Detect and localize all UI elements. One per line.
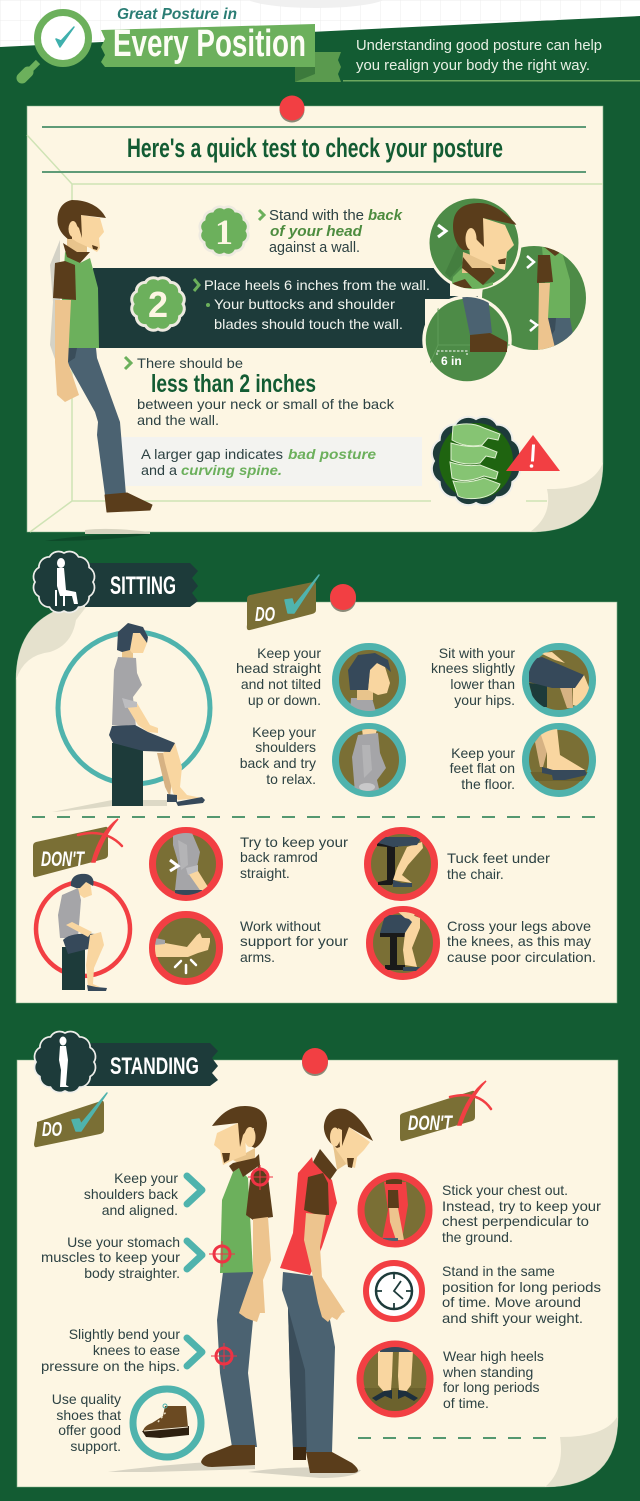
tag: do: DO bbox=[42, 1119, 62, 1141]
pin bbox=[302, 1048, 328, 1076]
text: bad posture note: A larger gap indicates bbox=[141, 446, 283, 462]
section header: sitting: SITTING bbox=[110, 572, 176, 600]
tip: knees lower: Sit with your bbox=[439, 645, 515, 661]
figure: man with good posture bbox=[108, 1106, 273, 1472]
text: high heels: Wear high heels bbox=[443, 1348, 544, 1364]
tip: quality shoes: shoes that bbox=[56, 1407, 121, 1423]
icon: unsupported arm bbox=[152, 914, 220, 982]
icon: high heels bbox=[360, 1344, 430, 1414]
text: same position: of time. Move around bbox=[442, 1294, 581, 1310]
icon: boot bbox=[133, 1389, 201, 1457]
text: step 1 bbox=[259, 208, 403, 256]
divider bbox=[32, 816, 600, 818]
tag: do bbox=[34, 1093, 107, 1147]
tag: don't bbox=[400, 1081, 491, 1141]
tip: shoulders back: back and try bbox=[240, 755, 316, 771]
figure: man against wall bbox=[50, 200, 152, 512]
header description bbox=[343, 38, 640, 82]
tip: quality shoes bbox=[52, 1391, 121, 1454]
tip: head straight bbox=[236, 645, 321, 708]
tag: don't bbox=[33, 819, 122, 877]
tip: arms: Work without bbox=[240, 918, 321, 934]
section header: standing: STANDING bbox=[110, 1053, 199, 1080]
text: less than 2 inches: less than 2 inches bbox=[151, 370, 316, 398]
heading: quick test: Here's a quick test to check your posture bbox=[127, 133, 503, 163]
text: high heels: when standing bbox=[442, 1364, 533, 1380]
tip: shoulders back: shoulders back bbox=[84, 1186, 179, 1202]
heading: great posture in: Great Posture in bbox=[117, 6, 237, 23]
tag: don't: DON'T bbox=[408, 1112, 453, 1135]
tip: feet flat bbox=[450, 745, 515, 792]
tip: crossed legs: Cross your legs above bbox=[447, 918, 591, 934]
tip: shoulders back: and aligned. bbox=[102, 1202, 178, 1218]
text: chest out: Stick your chest out. bbox=[442, 1182, 568, 1198]
tip: bend knees: Slightly bend your bbox=[69, 1326, 180, 1342]
label: 6 in: 6 in bbox=[441, 354, 462, 368]
badge: 1 bbox=[200, 207, 248, 255]
pin bbox=[330, 584, 356, 612]
icon: tucked feet bbox=[368, 830, 434, 898]
text: high heels bbox=[442, 1348, 544, 1411]
ribbon: every position bbox=[101, 23, 341, 82]
tip: stomach muscles bbox=[41, 1234, 202, 1281]
tip: knees lower bbox=[431, 645, 515, 708]
text: same position bbox=[442, 1263, 601, 1326]
tip: ramrod: back ramrod bbox=[240, 849, 318, 865]
panel: sitting bbox=[16, 552, 617, 1003]
tip: stomach muscles: muscles to keep your bbox=[41, 1249, 180, 1265]
step 2 bbox=[132, 277, 430, 332]
figure: man with poor posture bbox=[248, 1109, 373, 1478]
circle: head detail bbox=[428, 197, 520, 295]
text: step 1: Stand with the bbox=[269, 208, 364, 224]
band: step 2 background bbox=[93, 268, 478, 348]
icon: knees detail bbox=[526, 646, 592, 714]
target markers bbox=[209, 1165, 273, 1369]
text: high heels: for long periods bbox=[443, 1379, 540, 1395]
icon: ramrod back bbox=[152, 830, 220, 898]
tip: tuck feet bbox=[447, 850, 550, 882]
gap note box bbox=[120, 437, 422, 486]
icon: clock bbox=[366, 1263, 422, 1319]
text: step 1: against a wall. bbox=[269, 240, 360, 256]
tip: shoulders back: Keep your bbox=[114, 1170, 178, 1186]
text: bad posture note bbox=[141, 446, 376, 478]
divider bbox=[358, 1437, 548, 1439]
tip: feet flat: the floor. bbox=[461, 776, 515, 792]
icon: head detail bbox=[336, 646, 402, 714]
tip: shoulders back bbox=[240, 724, 316, 787]
text: same position: Stand in the same bbox=[442, 1263, 555, 1279]
panel: quick test bbox=[27, 96, 603, 541]
tip: tuck feet: Tuck feet under bbox=[447, 850, 550, 866]
tip: quality shoes: support. bbox=[70, 1438, 121, 1454]
tip: ramrod: Try to keep your bbox=[240, 834, 348, 850]
text: step 2: Your buttocks and shoulder bbox=[214, 296, 395, 312]
icon: sitting silhouette bbox=[55, 558, 78, 606]
tip: arms: arms. bbox=[240, 949, 275, 965]
tip: head straight: Keep your bbox=[257, 645, 321, 661]
tip: shoulders back: to relax. bbox=[266, 771, 316, 787]
icon: shoulders detail bbox=[336, 726, 402, 794]
header description: you realign your body the right way. bbox=[356, 58, 590, 74]
step 1 bbox=[200, 207, 403, 256]
text: high heels: of time. bbox=[443, 1395, 489, 1411]
tip: feet flat: feet flat on bbox=[450, 760, 515, 776]
tip: head straight: up or down. bbox=[248, 692, 321, 708]
tag: do bbox=[247, 575, 319, 630]
text: bad posture note: bad posture bbox=[288, 446, 376, 462]
badge: 1: 1 bbox=[215, 212, 233, 252]
panel: standing bbox=[17, 1032, 618, 1487]
tip: ramrod: straight. bbox=[240, 865, 290, 881]
text: chest out bbox=[442, 1182, 601, 1245]
text: bad posture note: curving spine. bbox=[181, 462, 282, 478]
tip: arms bbox=[240, 918, 348, 965]
tip: stomach muscles: body straighter. bbox=[84, 1265, 180, 1281]
text: bad posture note: and a bbox=[141, 462, 177, 478]
dont tips bbox=[152, 830, 596, 982]
text: chest out: Instead, try to keep your bbox=[442, 1198, 601, 1214]
tip: shoulders back bbox=[84, 1170, 202, 1218]
figure: seated woman, poor posture bbox=[36, 874, 130, 991]
text: less than 2 inches: There should be bbox=[137, 355, 243, 371]
badge: 2 bbox=[132, 278, 184, 330]
text: step 2: Place heels 6 inches from the wall. bbox=[204, 277, 430, 293]
tip: stomach muscles: Use your stomach bbox=[67, 1234, 180, 1250]
icon: feet detail bbox=[526, 726, 592, 794]
tip: knees lower: your hips. bbox=[454, 692, 515, 708]
tip: feet flat: Keep your bbox=[451, 745, 515, 761]
text: same position: position for long periods bbox=[442, 1279, 601, 1295]
text: chest out: chest perpendicular to bbox=[442, 1213, 589, 1229]
section header: sitting bbox=[34, 552, 198, 612]
text: less than 2 inches: between your neck or small of the back bbox=[137, 396, 395, 412]
do tips bbox=[236, 645, 592, 794]
tip: shoulders back: Keep your bbox=[252, 724, 316, 740]
tip: head straight: and not tilted bbox=[241, 676, 321, 692]
tip: quality shoes: Use quality bbox=[52, 1391, 121, 1407]
text: step 1: of your head bbox=[270, 224, 363, 240]
text: step 1: back bbox=[368, 208, 403, 224]
tag: do: DO bbox=[255, 604, 275, 626]
text: less than 2 inches: and the wall. bbox=[137, 412, 219, 428]
tip: arms: support for your bbox=[240, 933, 348, 949]
ribbon: every position: Every Position bbox=[113, 23, 306, 65]
tip: bend knees: knees to ease bbox=[93, 1342, 180, 1358]
text: same position: and shift your weight. bbox=[442, 1310, 583, 1326]
section header: standing bbox=[35, 1032, 218, 1092]
header bbox=[22, 6, 640, 82]
header description: Understanding good posture can help bbox=[356, 38, 602, 54]
tip: crossed legs bbox=[447, 918, 596, 965]
tip: bend knees bbox=[41, 1326, 202, 1374]
tip: knees lower: knees slightly bbox=[431, 660, 515, 676]
figure: seated woman, good posture bbox=[52, 623, 210, 812]
icon: crossed legs bbox=[370, 910, 436, 976]
icon: spine badge with warning bbox=[432, 417, 560, 505]
circle: heel detail bbox=[424, 296, 512, 383]
badge: 2: 2 bbox=[148, 284, 168, 325]
text: chest out: the ground. bbox=[442, 1229, 513, 1245]
tip: crossed legs: cause poor circulation. bbox=[447, 949, 596, 965]
text: less than 2 inches bbox=[125, 355, 395, 428]
tip: shoulders back: shoulders bbox=[255, 739, 316, 755]
tip: quality shoes: offer good bbox=[58, 1422, 121, 1438]
pin bbox=[280, 96, 304, 122]
tip: tuck feet: the chair. bbox=[447, 866, 504, 882]
text: step 2 bbox=[194, 277, 430, 332]
circle: body detail bbox=[482, 246, 586, 352]
tip: crossed legs: the knees, as this may bbox=[447, 933, 591, 949]
tip: knees lower: lower than bbox=[450, 676, 515, 692]
dont tip: chest out bbox=[361, 1176, 429, 1244]
tip: head straight: head straight bbox=[236, 660, 321, 676]
tip: ramrod bbox=[240, 834, 348, 881]
tag: don't: DON'T bbox=[41, 848, 85, 871]
icon: standing silhouette bbox=[59, 1036, 69, 1087]
icon: magnifying glass with check bbox=[22, 12, 88, 78]
text: step 2: blades should touch the wall. bbox=[214, 316, 403, 332]
tip: bend knees: pressure on the hips. bbox=[41, 1358, 180, 1374]
